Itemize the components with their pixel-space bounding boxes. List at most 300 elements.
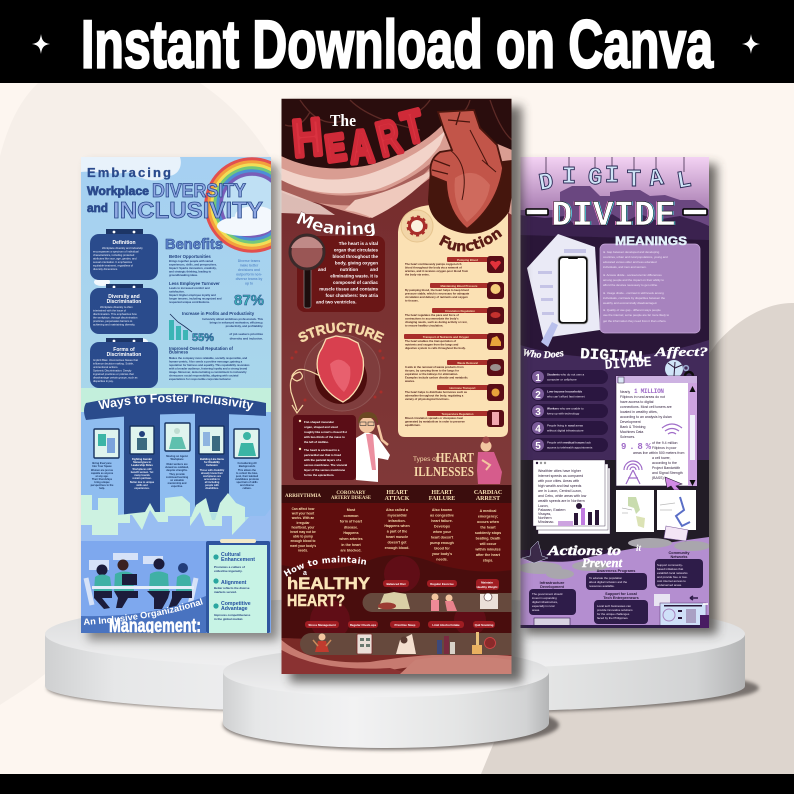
panel: community networks: Community (669, 551, 690, 555)
poster title: DIVERSITY (152, 181, 246, 202)
function rows: Waste Removal (457, 361, 478, 365)
panel: support for local tech entrepreneurs: Support for Local (605, 592, 637, 596)
cardiac arrest column: suddenly stops (475, 531, 501, 535)
panel: structure notes: The heart is enclosed in a (304, 448, 340, 452)
panel: community networks: and provide free or low- (657, 575, 687, 579)
panel: support for local tech entrepreneurs: provide innovative solutions (597, 608, 633, 612)
panel: diversity and discrimination: Discrimination (107, 299, 141, 305)
column text: They provide (169, 473, 185, 476)
panel: community networks: Networks (670, 555, 688, 559)
column text: Leadership Roles (131, 463, 153, 467)
poster title: the heart: A (347, 119, 376, 173)
panel: forms of discrimination: Forms of (113, 347, 135, 353)
dark lower band (520, 460, 709, 550)
benefits text: Brings together people with varied (169, 259, 214, 263)
cardiac arrest column: CARDIAC (474, 490, 502, 496)
illustration: structure heart (290, 335, 384, 411)
stat caption: of job seekers prioritize (229, 332, 263, 336)
info window: of the 9.4 million (652, 441, 678, 445)
function rows: nutrients and oxygen from the lungs and (405, 342, 459, 346)
top gradient sky (520, 157, 709, 212)
function rows: The heart helps to distribute hormones such as (405, 390, 468, 394)
panel: advantages card: Cultural (221, 552, 241, 558)
benefits text: diverse teams by (236, 277, 263, 281)
coronary column: CORONARY (336, 491, 366, 496)
column text: workplaces are (203, 475, 222, 478)
heading: digital (538, 166, 692, 190)
function rows: contractions to accommodate the body's (405, 316, 459, 320)
benefits text (169, 254, 263, 304)
column text (91, 454, 259, 490)
info window: and Signal Strength (652, 471, 683, 475)
panel: meaning: organ that circulates (334, 248, 378, 252)
heart attack column: doesn't get (387, 540, 407, 544)
benefits: reputation (168, 346, 250, 381)
coronary column: Most (347, 508, 356, 512)
affected groups list: keep up with technology (547, 412, 580, 416)
info window: Project Bandwidth (652, 466, 680, 470)
column text: Better due to unique (130, 481, 155, 484)
benefits text: Less Employee Turnover (169, 281, 220, 286)
column text: pool, their talented (236, 475, 259, 478)
panel: meanings: afford the devices necessary to get online. (603, 283, 658, 287)
panel: structure notes: forms the epicardium. (304, 473, 334, 477)
heading: digital: D (537, 169, 556, 198)
poster title: INCLUSIVITY (113, 197, 263, 223)
heading: structure: STRUCTURE (298, 322, 384, 343)
panel: support for local tech entrepreneurs: faced by the Philippines. (597, 616, 629, 620)
affected groups list: 5 (535, 441, 541, 452)
heart failure column: heart failure. (431, 519, 453, 523)
coronary column: are blocked. (341, 549, 361, 553)
back pedestal (45, 598, 759, 714)
function rows: The heart regulates the pace and force of (405, 313, 459, 317)
healthy habits: row two: Quit Smoking (475, 623, 494, 627)
function rows: Maintaining Blood Pressure (440, 284, 478, 288)
affected groups list: access to telehealth appointments (547, 446, 593, 450)
benefits text: experiences, skills, and perspectives. (169, 262, 217, 266)
heading: how to maintain a healthy heart: hEALTHY (287, 574, 371, 593)
heart attack column: enough blood. (385, 546, 409, 550)
panel: forms of discrimination: disparities in pay. (93, 379, 114, 383)
column text: Women are just as (91, 469, 114, 472)
panel: meaning: eliminating waste. It is (330, 274, 378, 278)
heading: digital: I (605, 163, 619, 190)
column text: remain partisan. (132, 477, 152, 480)
column text: mentorship and (168, 482, 187, 485)
column text: Into Your Space (92, 464, 112, 468)
poster title: the heart: H (290, 108, 325, 169)
benefits text: decisions and (238, 268, 260, 272)
column text: skills and (136, 484, 148, 487)
heart attack column: Also called a (386, 508, 409, 512)
function rows: Blood circulation spreads or dissipates heat (405, 416, 463, 420)
heading: digital: T (627, 167, 641, 194)
panel: support for local tech entrepreneurs (594, 592, 648, 624)
poster shadow: middle (290, 106, 522, 682)
function rows: arteries, and it receives oxygen-poor blood from (405, 269, 469, 273)
panel: definition: equitable treatment, regardless of (93, 264, 133, 268)
column text: viewed as outdated, (165, 466, 189, 469)
panel: meaning: and two ventricles. (316, 300, 357, 304)
panel: meaning: and (370, 267, 378, 272)
function rows: The heart continuously pumps oxygen-rich (405, 262, 462, 266)
panel: forms of discrimination: Discrimination (107, 352, 141, 358)
info window: (BASS). (652, 476, 665, 480)
benefits: reputation: Makes the company more relatable, socially responsible, and (169, 356, 247, 360)
paper: city speeds: and Cebu, while areas with low (538, 494, 587, 498)
illustration: paper and phone (527, 234, 600, 347)
heading: meaning: Meaning (296, 212, 376, 236)
column text: help. (99, 487, 105, 490)
healthy habits: row two (305, 621, 496, 654)
panel: meanings: get the information they need from it than others. (603, 319, 667, 323)
heading: divide (525, 201, 708, 226)
heading: actions to prevent: it (636, 543, 642, 553)
panel: awareness programs (586, 569, 647, 590)
panel: structure notes: serous membrane. The visceral (304, 463, 347, 467)
heading: how to maintain a healthy heart: How to maintain (284, 556, 366, 576)
column text: accessible to (204, 478, 220, 481)
columns (81, 412, 271, 520)
function rows: Circulation Regulation (445, 309, 475, 313)
panel: community networks: cost internet access to (657, 579, 686, 583)
healthy heart backdrop base (282, 485, 512, 575)
benefits text: groundbreaking ideas. (169, 273, 198, 277)
panel: meanings: individuals, and men and women. (603, 265, 647, 269)
paper: city speeds: Visayas, (538, 512, 551, 516)
heading: divide: DIVIDE (552, 196, 676, 236)
heading: actions to prevent (547, 543, 642, 570)
affected groups list: Students who do not own a (547, 372, 585, 376)
panel: meanings: use the internet; some people are far more likely to (603, 313, 669, 317)
dark vessel backdrop (281, 98, 512, 175)
function rows: to tissues. (405, 298, 419, 302)
ways heading banner: Ways to Foster Inclusivity (98, 394, 254, 412)
function rows: It aids in the removal of waste products from (405, 365, 464, 369)
info window: located in wealthy cities, (620, 410, 658, 414)
benefits: profits and productivity: Increase in Profits and Productivity (182, 311, 255, 316)
panel: infrastructure development: invest in expanding (532, 596, 557, 600)
affected groups list: without digital infrastructure (547, 428, 584, 432)
heading: digital: G (587, 165, 603, 192)
heading: digital: L (675, 167, 694, 196)
column text: expertise. (171, 485, 183, 488)
cardiac arrest column: stops. (483, 558, 493, 562)
panel: meaning: body, giving oxygen (335, 260, 378, 266)
panel: advantages card: Competitive (221, 601, 251, 607)
function rows: Transport of Nutrients and Oxygen (423, 335, 469, 339)
panel: structure notes: organ, shaped and sized (304, 425, 338, 429)
bottom banner (0, 774, 794, 794)
panel: support for local tech entrepreneurs: Local tech businesses can (597, 604, 631, 608)
illustration: anatomical heart (428, 110, 512, 234)
heading: who does digital divide affect: Affect? (654, 344, 709, 359)
icon: magnifying glass (290, 235, 324, 308)
panel: awareness programs: Awareness Programs (597, 569, 635, 573)
panel: community networks (655, 551, 703, 588)
panel: diversity and discrimination: Workplace diversity is often (100, 305, 133, 309)
benefits text: respected unique contributions. (169, 300, 210, 304)
heart failure column: FAILURE (429, 496, 455, 502)
info window: 9.8% (621, 442, 652, 452)
arrow: loop (290, 369, 320, 413)
affected groups list: 4 (535, 424, 541, 435)
function rows: digestive system to cells throughout the body. (405, 346, 466, 350)
panel: infrastructure development: especially in rural (532, 604, 555, 608)
heading: types of heart illnesses: Types of (413, 456, 438, 463)
heart attack column: Happens when (384, 524, 410, 528)
benefits: reputation: showcases social responsibility, aligning with societal (169, 374, 239, 378)
rainbow (204, 157, 271, 253)
panel: meaning: composed of cardiac (333, 280, 378, 285)
column text: disabilities. (205, 487, 219, 490)
paper: city speeds: Mindanao. (538, 520, 554, 524)
panel: forms of discrimination: ingrained practices or policies that (93, 372, 134, 376)
arrhythmia column: enough blood to (291, 539, 316, 543)
function rows (404, 256, 504, 427)
heart failure column: pump enough (430, 541, 454, 545)
function rows: tissues, by carrying them to the lungs for (405, 368, 460, 372)
healthy habits: row two: Limit Alcohol Intake (432, 623, 460, 627)
benefits: reputation: image. Moreover, demonstrating a commitment to inclusivity (169, 370, 247, 374)
coronary column: ARTERY DISEASE (331, 496, 372, 501)
function rows: the body via veins. (405, 272, 430, 276)
panel: awareness programs: about digital inclusion and the (589, 580, 627, 584)
benefits: reputation: human-centric. Also sends a positive message; gaining a (169, 360, 243, 364)
healthy heart backdrop (282, 555, 512, 640)
heading: digital: A (647, 165, 666, 194)
icon: gears and windmill (665, 360, 694, 376)
paper: city speeds: Luzon, (538, 504, 549, 508)
info window: 1 MILLION (634, 388, 664, 395)
arrhythmia column: irregular (297, 521, 310, 525)
heading: who does digital divide affect: DIVIDE (604, 355, 652, 374)
healthy habits: row two: Stress Management (308, 623, 336, 627)
function rows: Examples include carbon dioxide and metabolic (405, 376, 468, 380)
column text: on valuable (170, 479, 184, 482)
benefits text: Leads to increased comfort and (169, 286, 210, 290)
panel: structure notes: with two-thirds of the mass to (303, 435, 345, 439)
panel: infrastructure development: Development (540, 585, 565, 589)
icon: gear with bulb (401, 210, 433, 242)
function rows: Pumping Blood (457, 258, 478, 262)
coronary column (331, 491, 372, 553)
affected groups list: People living in rural areas (547, 424, 584, 428)
cardiac arrest column: the heart (480, 526, 496, 530)
heart failure column (429, 490, 455, 562)
paper: city speeds: are in Luzon, Central Luzon, (538, 489, 582, 493)
org heading: Management: (109, 616, 201, 637)
heading: actions to prevent: Actions to (547, 544, 621, 559)
column text: This allows the (238, 469, 257, 472)
heading: digital: I (562, 164, 576, 191)
coronary column: common (344, 514, 358, 518)
arrhythmia column (285, 494, 321, 552)
panel: infrastructure development: The government should (532, 592, 563, 596)
panel: structure notes: with the parietal layers of a (303, 458, 342, 462)
heart failure column: needs. (436, 558, 448, 562)
panel: advantages card: Advantage (221, 606, 248, 612)
function rows: adrenaline throughout the body, regulating a (405, 394, 464, 398)
stat caption: diversity and inclusion. (230, 336, 263, 340)
panel: advantages card: Promotes a culture of (214, 565, 245, 569)
column text: culture. (242, 487, 252, 490)
column text: at any age. (96, 475, 109, 478)
heading: divide: DIVIDE (552, 196, 676, 236)
panel: definition: Workplace diversity and inclusivity (102, 246, 143, 250)
column text: spectrum of skills (236, 481, 258, 484)
panel: definition: characteristics, including protected (93, 253, 135, 257)
affected groups list: 2 (535, 390, 541, 401)
column text: candidates promote (235, 478, 259, 481)
panel: meaning: and (318, 267, 326, 272)
benefits: reputation: expectations for responsible corporate behavior. (169, 377, 232, 381)
benefits: profits and productivity: brings in enhanced motivation, efficiency, (210, 320, 263, 324)
heading: types of heart illnesses: HEART (436, 451, 475, 466)
column text: Older workers are (166, 463, 188, 466)
info window: have access to digital (620, 400, 654, 404)
lower mint band (81, 388, 271, 513)
poster title (86, 167, 264, 218)
heart failure column: heart doesn't (431, 536, 454, 540)
panel: support for local tech entrepreneurs: for the unique challenges (597, 612, 630, 616)
heart failure column: when your (432, 530, 452, 534)
panel: definition: attributes like race, age, gender, and (93, 256, 137, 260)
panel: structure notes: pericardial sac that is lined (304, 453, 341, 457)
column text: Considering All (237, 461, 257, 465)
benefits text: outperform non- (236, 272, 262, 276)
panel: meanings: countries, urban and rural populations, young and (603, 255, 668, 259)
coronary column: when arteries (338, 537, 363, 541)
ways heading banner (84, 394, 266, 420)
skyline: mint (81, 493, 245, 535)
column text: continued learning (166, 476, 189, 479)
function rows: The heart enables the transportation of (405, 339, 456, 343)
panel: forms of discrimination: Implicit Bias: Unconscious biases that (93, 358, 138, 362)
heart attack column: infarction. (388, 519, 406, 523)
heart failure column: blood for (434, 546, 450, 550)
column text: Workplace (170, 457, 184, 461)
coronary column: disease. (344, 525, 358, 529)
paper: city speeds: with poor cities. Areas with (538, 479, 579, 483)
benefits: reputation: with a broader audience, fostering loyalty and a strong brand (168, 366, 247, 370)
benefits text: Impact: Higher employee loyalty and (169, 293, 216, 297)
column text: Their friendships (92, 478, 113, 481)
illustration: device window (654, 594, 708, 627)
heart failure column: as congestive (430, 514, 454, 518)
cardiac arrest column: occurs when (477, 520, 499, 524)
cardiac arrest column: ARREST (476, 496, 500, 502)
coronary column: Happens (343, 531, 359, 535)
benefits: profits and productivity: productivity, and profitability. (226, 324, 263, 328)
panel: diversity and discrimination: discrimination. This emphasizes how (93, 312, 137, 316)
column text: Fighting Gender (132, 457, 152, 461)
icon: left sparkle (32, 34, 50, 54)
panel: meaning: nutrition (340, 267, 358, 272)
benefits text: longer tenures, including recognized and (169, 296, 222, 300)
panel: diversity and discrimination: Diversity and (108, 294, 140, 300)
panel: advantages card: markets served. (214, 590, 237, 594)
paper: city speeds: wealth speeds are in Northern (538, 499, 585, 503)
org heading: An Inclusive Organizational (84, 598, 203, 625)
cardiac arrest column: within minutes (474, 548, 501, 552)
function rows: equilibrium. (405, 423, 421, 427)
poster: the heart (282, 98, 512, 674)
panel: forms of discrimination: unintentional actions. (93, 365, 119, 369)
benefits text: Impact: Sparks innovation, creativity, (169, 266, 217, 270)
function rows: expiration or the kidneys for elimination. (405, 372, 458, 376)
column text: already know their (201, 472, 223, 475)
heart failure column: Develops (434, 524, 450, 528)
arrhythmia column: able to pump (293, 535, 313, 539)
top banner (0, 0, 794, 83)
icon: right sparkle (742, 34, 760, 54)
poster title: the heart (290, 100, 429, 173)
cardiac arrest column: A medical (480, 509, 496, 513)
footer bar and keyboard (520, 615, 709, 628)
heading: types of heart illnesses (413, 451, 475, 480)
heart failure column: HEART (431, 490, 453, 496)
benefits text: Better Opportunities (169, 254, 211, 259)
cardiac arrest column: beating. Death (476, 536, 500, 540)
illnesses area (282, 485, 512, 562)
panel: advantages card: Better reflects the diverse (214, 586, 250, 590)
affected groups list: who can't afford fast internet (547, 394, 585, 398)
panel: community networks: underserved areas. (657, 583, 682, 587)
poster title: the heart: T (397, 100, 429, 154)
arrhythmia column: well your heart (291, 512, 315, 516)
heading: actions to prevent: Prevent (582, 555, 622, 570)
healthy habits: row two: Prioritize Sleep (395, 623, 416, 627)
panel: support for local tech entrepreneurs: Tech Entrepreneurs (603, 596, 639, 600)
background blob: dark lower right (481, 303, 794, 774)
illustration: doctor (356, 412, 390, 482)
heart attack column: myocardial (388, 513, 406, 517)
function rows: blood throughout the body via a network of (405, 266, 462, 270)
column text: Those with disability (200, 469, 225, 472)
panel: meaning (297, 236, 385, 312)
healthy habits: row one: Maintain (481, 580, 493, 584)
column text: experiences. (134, 487, 150, 490)
paper: city speeds: internet speeds as compared (538, 474, 583, 478)
function rows: pressure stable, which is necessary for adequate (405, 292, 470, 296)
function rows: generated by metabolism in order to preserve (405, 420, 465, 424)
column text: Backgrounds (239, 464, 256, 468)
heading: function: Function (438, 230, 502, 252)
heart failure column: Also known (432, 508, 452, 512)
map images (616, 490, 696, 532)
healthy habits: row one: Regular Exercise (430, 582, 454, 586)
column text: Bring Everyone (92, 461, 112, 465)
info window: a cell tower, (652, 456, 671, 460)
panel: community networks: establish local networks (657, 571, 688, 575)
benefits text: and strategic thinking, leading to (169, 270, 211, 274)
paper: city speeds: Palawan, Eastern (538, 508, 565, 512)
benefits text: Diverse teams (238, 259, 260, 263)
icon: tablet right (664, 526, 688, 541)
panel: definition: diversity dimensions. (93, 267, 118, 271)
column text: Building Line Items (200, 457, 225, 461)
panel: meanings: MEANINGS (615, 234, 687, 248)
column text: benefit women. Yet (131, 471, 153, 474)
team illustration (86, 553, 196, 610)
cardiac arrest column: will occur (479, 542, 497, 546)
affected groups list: Workers who are unable to (547, 406, 584, 410)
panel: diversity and discrimination: achieving and maintaining diversity. (93, 322, 135, 326)
panel: advantages card: collective ingenuity. (214, 569, 243, 573)
info window (616, 376, 697, 490)
